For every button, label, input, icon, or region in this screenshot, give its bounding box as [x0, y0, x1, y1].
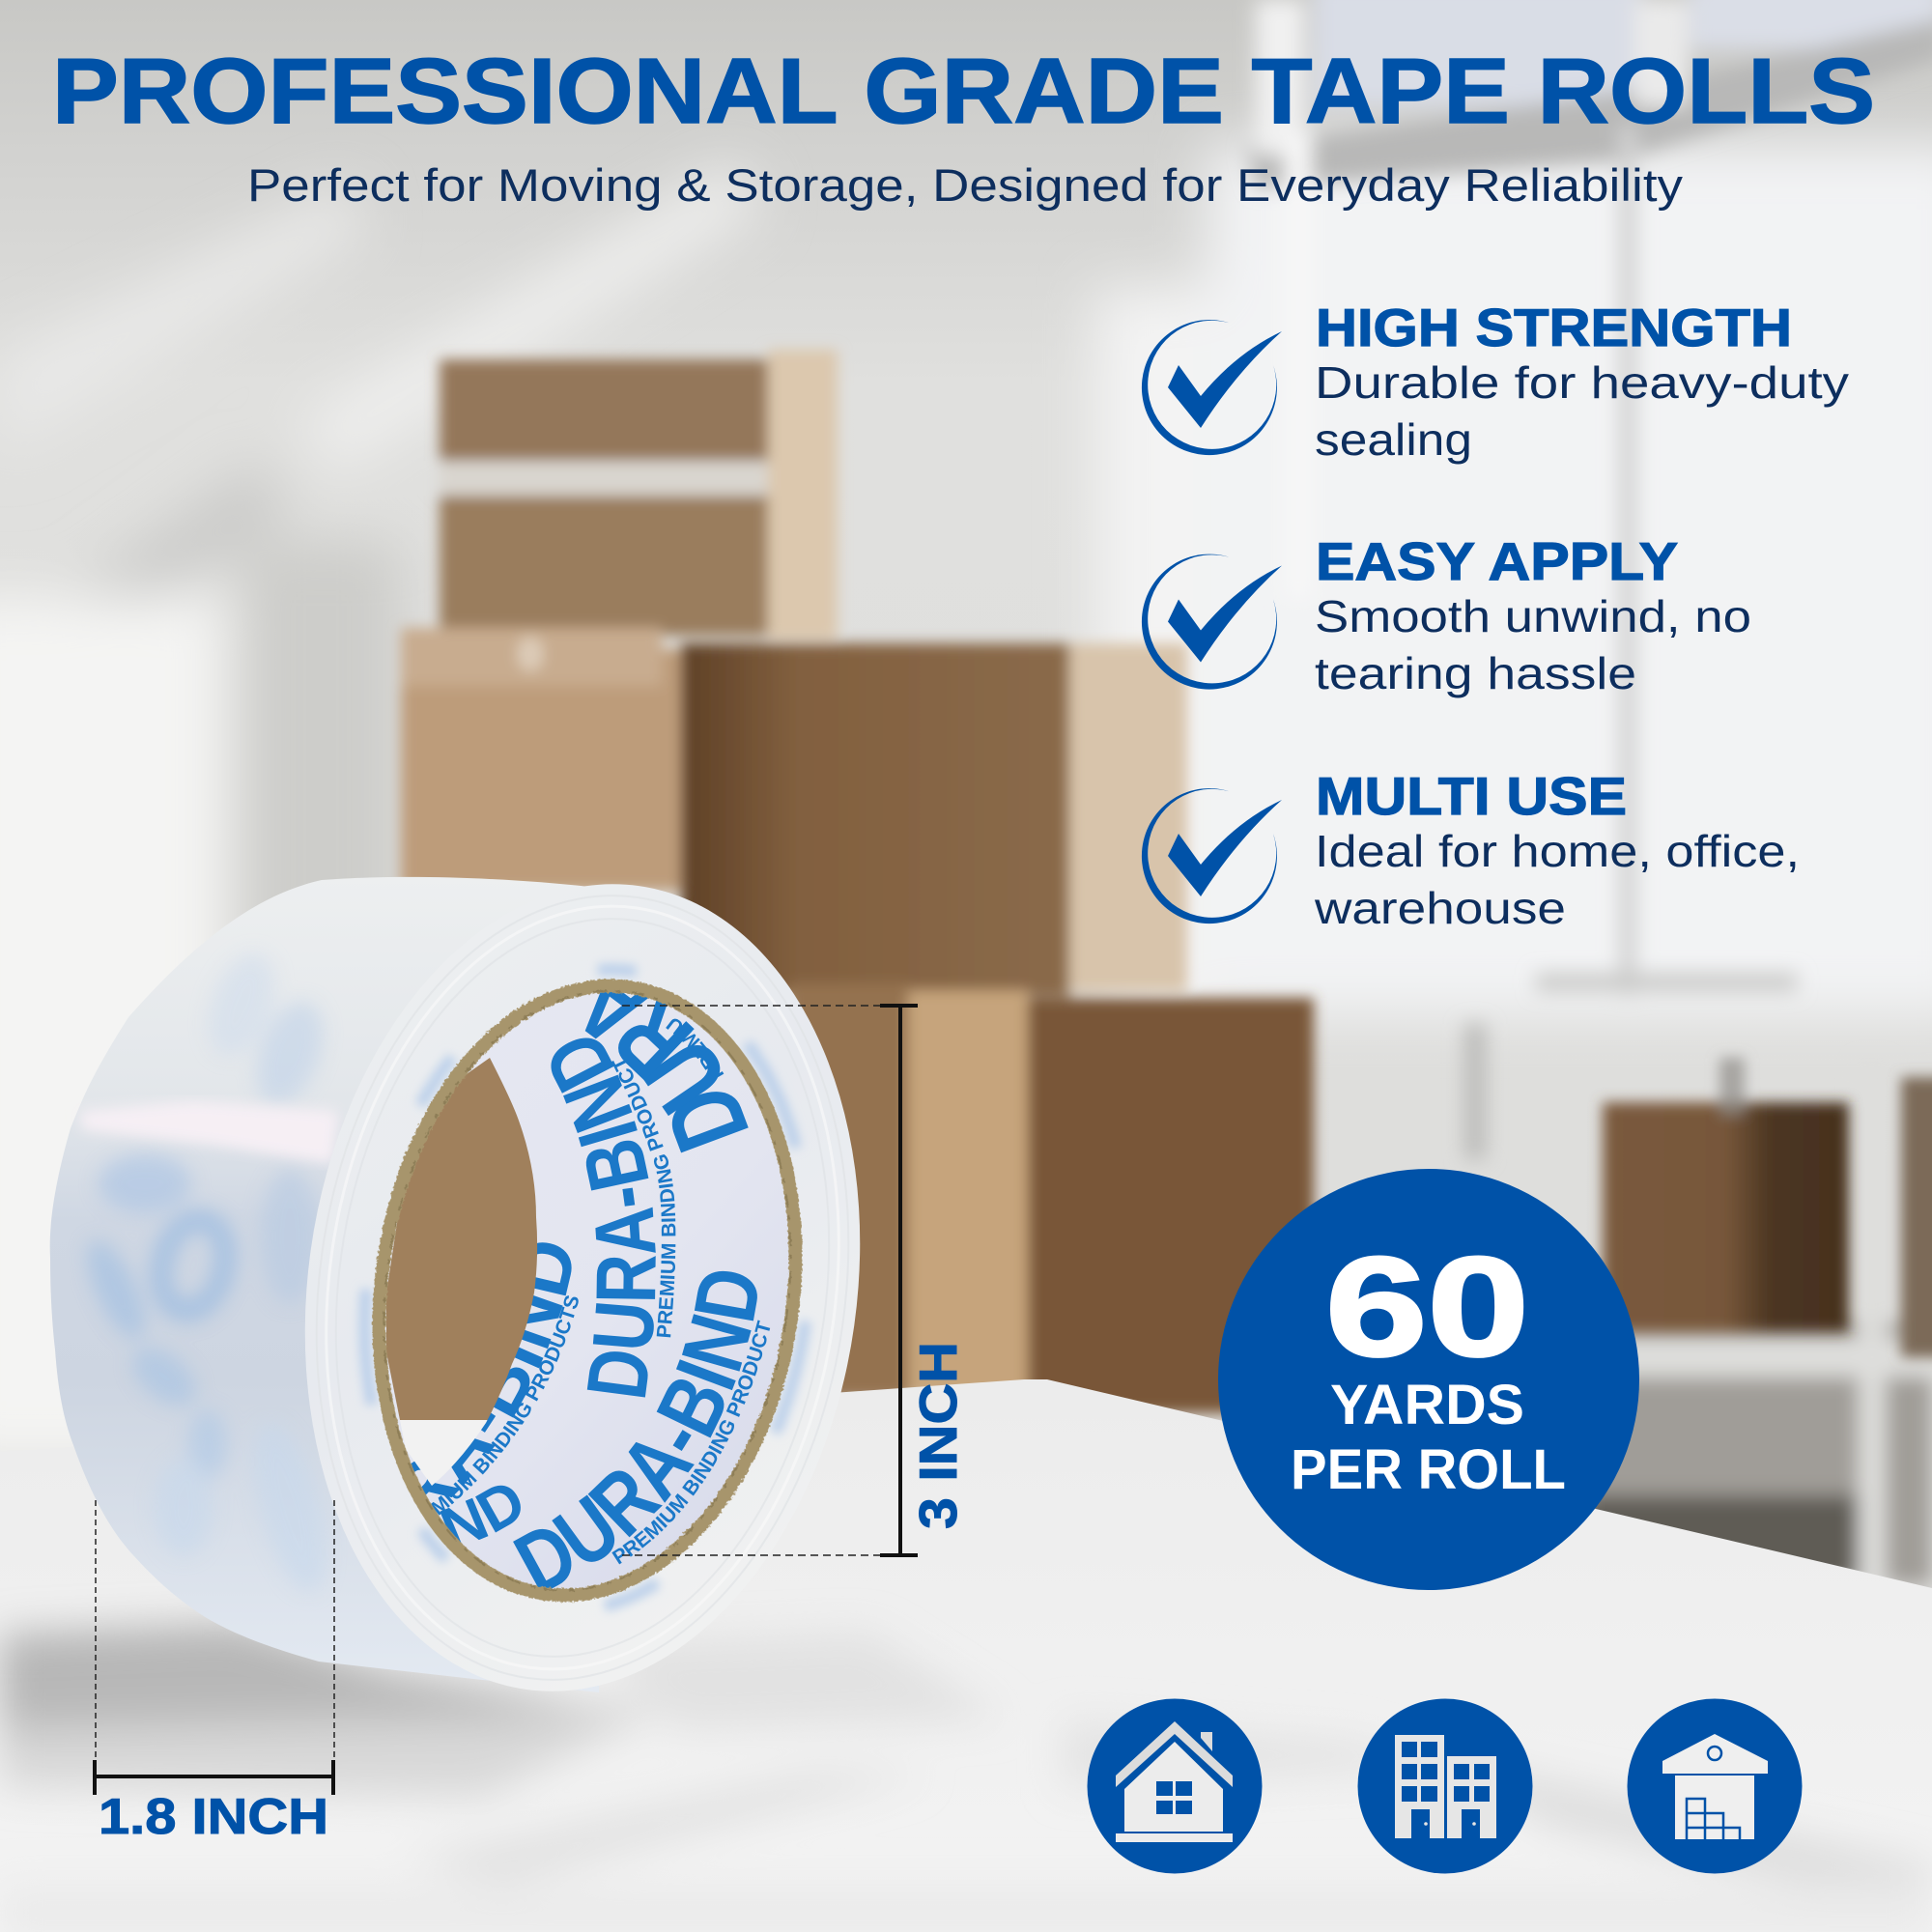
cardboard core and printed liner: PREMIUM: [666, 1018, 724, 1078]
icon: house: [1088, 1698, 1262, 1874]
heading: multi use: MULTI USE: [1316, 766, 1627, 826]
dimension: 1.8 inch: [95, 1500, 334, 1845]
cardboard core and printed liner: PREMIUM BINDING PRODUCTS: [611, 1320, 771, 1565]
cardboard core and printed liner: DURA-BIND: [551, 1037, 656, 1397]
text: high strength description: sealing: [1315, 414, 1472, 465]
icon: warehouse: [1627, 1698, 1803, 1874]
badge number: 60: [1325, 1228, 1529, 1385]
tape roll: [50, 877, 860, 1692]
ghost print on tape body: [76, 945, 340, 1599]
tape body highlight: [80, 1101, 338, 1164]
subtitle: Perfect for Moving & Storage, Designed for Everyday Reliability: [247, 159, 1684, 211]
feature: high strength: [1142, 298, 1849, 465]
cardboard core and printed liner: PREMIUM BINDING PRODUCTS: [611, 1061, 676, 1337]
heading: high strength: HIGH STRENGTH: [1316, 298, 1792, 357]
text: easy apply description: Smooth unwind, no: [1315, 591, 1751, 641]
badge label: PER ROLL: [1291, 1438, 1566, 1501]
title: PROFESSIONAL GRADE TAPE ROLLS: [52, 40, 1875, 143]
badge label: YARDS: [1330, 1374, 1524, 1436]
cardboard core and printed liner: PREMIUM BINDING PRODUCTS: [431, 1295, 579, 1516]
heading: easy apply: EASY APPLY: [1316, 531, 1678, 591]
dimension: 3 inch: [622, 1006, 968, 1555]
tabletop: [0, 1379, 1932, 1932]
cardboard core and printed liner: DURA-BIND: [513, 1271, 757, 1589]
icon: check circle: [1142, 320, 1282, 455]
dimension: 1.8 inch: 1.8 INCH: [99, 1789, 328, 1845]
feature: multi use: [1142, 766, 1800, 933]
text: multi use description: Ideal for home, office,: [1315, 826, 1800, 876]
text: easy apply description: tearing hassle: [1315, 648, 1636, 698]
tape front ring: [254, 848, 911, 1727]
text: multi use description: warehouse: [1314, 883, 1566, 933]
feature: easy apply: [1142, 531, 1751, 698]
icon: check circle: [1142, 554, 1282, 690]
badge: 60 yards per roll: [1218, 1169, 1639, 1590]
cardboard core and printed liner: [371, 978, 804, 1604]
text: high strength description: Durable for heavy-duty: [1315, 357, 1849, 408]
cardboard core and printed liner: BIND: [440, 1486, 521, 1544]
dimension: 3 inch: 3 INCH: [908, 1342, 968, 1529]
badge label: [1291, 1374, 1566, 1501]
icon: check circle: [1142, 788, 1282, 923]
tape body: [50, 877, 599, 1692]
icon: office buildings: [1358, 1698, 1532, 1874]
